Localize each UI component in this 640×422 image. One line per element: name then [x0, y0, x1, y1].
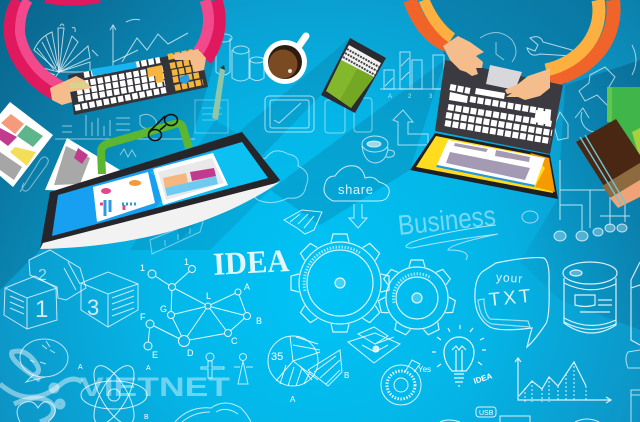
paper: report second [45, 138, 120, 192]
doodles: bar chart top [380, 52, 445, 100]
doodles: wrench [527, 37, 572, 56]
network letters: D [187, 348, 194, 358]
paper colour blocks [0, 114, 43, 180]
your label: your [496, 270, 524, 286]
book: green [607, 87, 640, 160]
doodles: network graph [140, 257, 262, 360]
doodles: people pins [201, 353, 253, 384]
monitor [40, 132, 280, 249]
paper: report left [0, 102, 53, 187]
panel: report [153, 153, 228, 205]
doodles: tin can [563, 262, 617, 333]
doodles: speech circle [20, 339, 68, 382]
keyboard [68, 50, 208, 115]
panel: pie dashboard [93, 172, 155, 222]
doodles: bottom shapes: A [146, 365, 151, 372]
doodles: bottom shapes: B [144, 414, 149, 421]
doodles: puzzle and recycle arrows [554, 45, 636, 140]
TXT label: TXT [488, 286, 535, 311]
book: brown [576, 119, 640, 208]
doodles: speech bubble [475, 258, 549, 347]
idea small label: IDEA [472, 371, 494, 386]
doodles: pencil right [631, 262, 640, 345]
network letters: G [160, 304, 167, 314]
doodles: clipboard [195, 100, 228, 133]
monitor screen [52, 142, 268, 236]
network letters: F [140, 312, 146, 322]
network letters: 1 [140, 263, 145, 273]
hand: left on keyboard [50, 76, 92, 105]
doodles: gear small [378, 260, 456, 336]
hand: right on laptop [505, 68, 550, 100]
long shadows [0, 0, 640, 330]
doodles: tablet with check mark [265, 96, 314, 132]
doodles: line graph [110, 19, 188, 72]
coffee cup [263, 36, 307, 84]
hand: left on laptop [443, 36, 484, 76]
share label: share [338, 182, 374, 197]
doodles: atom [81, 360, 147, 422]
doodles: ribbon under monitor [150, 218, 204, 254]
yes label: Yes [418, 365, 431, 374]
business label: Business [396, 200, 497, 241]
hand: right on keyboard [172, 49, 206, 72]
trackpad [486, 65, 522, 90]
doodles: desk charts [55, 114, 195, 157]
green handle [101, 124, 189, 174]
doodles: light bulb [432, 325, 494, 386]
doodles: bar chart top: A [388, 94, 392, 100]
doodles: business [396, 200, 498, 260]
pencil [212, 65, 225, 120]
network letters: 1 [184, 257, 189, 267]
keys orange [168, 52, 203, 88]
laptop screen lid [410, 133, 558, 199]
doodles: down arrow [349, 204, 367, 228]
doodles: area line chart [515, 358, 611, 403]
doodles: bottom shapes: A [78, 364, 83, 371]
doodles: top left pie chart [34, 24, 98, 82]
doodles: pie chart 35 [268, 336, 349, 404]
phone [321, 38, 386, 113]
laptop keys [445, 87, 552, 141]
doodles: spiral target [381, 360, 431, 405]
cube numbers: 1 [35, 296, 48, 323]
doodles: share cloud [324, 166, 389, 201]
doodles: numbered cubes [4, 250, 138, 329]
laptop [410, 60, 563, 199]
doodles: clock [480, 32, 516, 62]
doodles: bottom shapes [17, 364, 251, 422]
watermark: vietnet: VIETNET [80, 372, 231, 402]
doodles: flow diagram [554, 160, 630, 241]
doodles: pie chart 35: B [344, 371, 349, 380]
doodles: cans [216, 34, 264, 81]
doodles: turning arrow [393, 110, 428, 145]
glasses [148, 114, 178, 140]
doodles: pie chart 35: A [290, 395, 296, 404]
display bar [91, 62, 137, 76]
network letters [140, 257, 262, 360]
arm: pink [10, 0, 219, 97]
doodles: bar chart top: 2 [408, 94, 412, 100]
doodles: tea cup [362, 136, 394, 163]
doodles: open box [348, 327, 400, 363]
doodles: idea title: IDEA [212, 242, 290, 282]
arm: orange [410, 0, 614, 80]
doodles: hatched arrows near share [284, 210, 322, 234]
network letters: A [244, 282, 250, 292]
network letters: E [152, 350, 158, 360]
doodles: phone outlines [325, 98, 372, 133]
doodles: numbered cubes: 3 [87, 295, 99, 320]
network letters: B [256, 316, 262, 326]
keys white [75, 60, 166, 108]
pie value: 35 [271, 351, 283, 363]
doodles: gear large [291, 234, 389, 332]
laptop base [435, 60, 563, 154]
laptop document [437, 140, 545, 185]
doodles: bar chart top: 3 [429, 94, 433, 100]
watermark: logo swirl [0, 351, 82, 422]
usb label: USB [479, 410, 494, 417]
doodles: numbered cubes: 2 [38, 267, 47, 284]
doodles: can small [522, 211, 538, 223]
doodles: usb tags [440, 407, 599, 422]
network letters: L [206, 291, 211, 301]
doodles: puzzle right [626, 350, 640, 368]
doodles: cloud [251, 151, 308, 203]
doodles: paperclip [20, 157, 48, 192]
network letters: C [231, 336, 238, 346]
